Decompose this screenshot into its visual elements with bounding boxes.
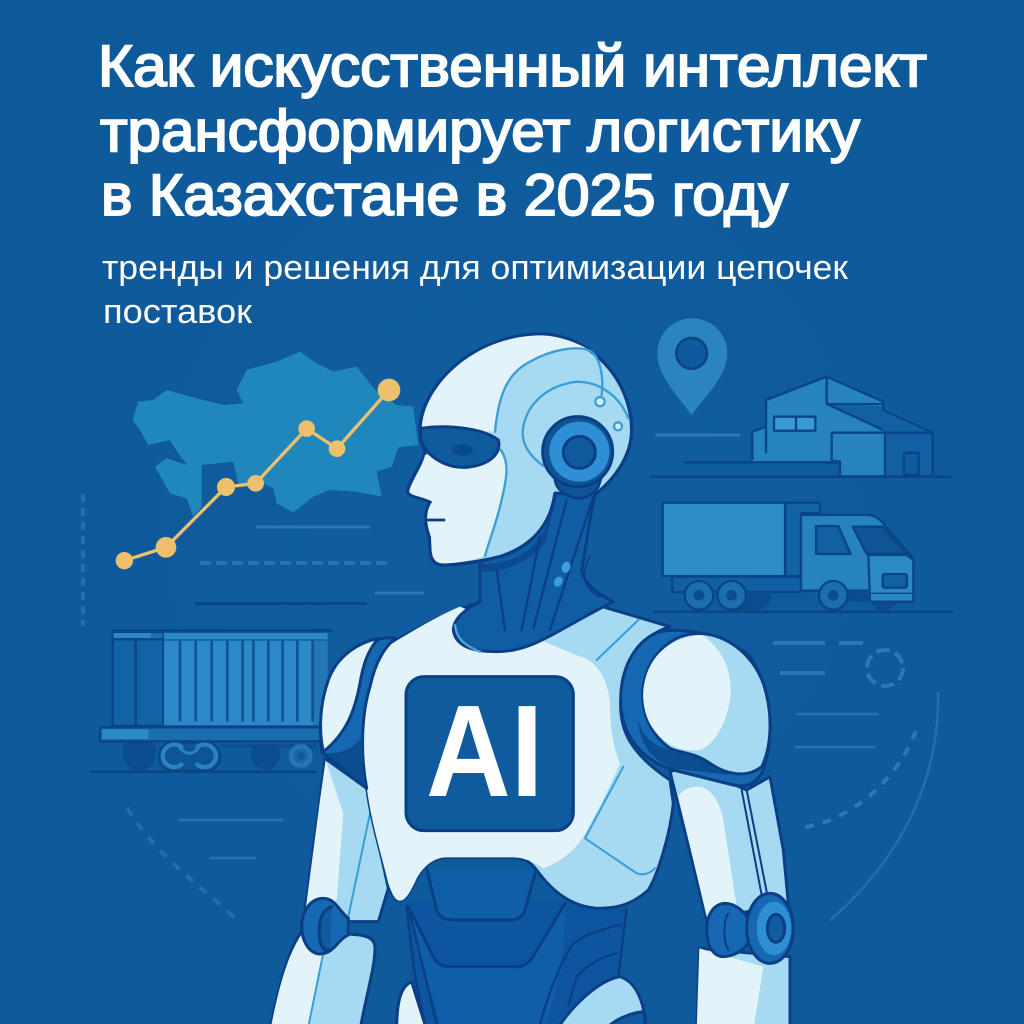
AI chest panel: AI [426, 678, 543, 824]
title: Как искусственный интеллект [98, 34, 927, 99]
robot body [270, 600, 793, 1024]
abdomen [405, 868, 627, 1024]
hips [397, 977, 646, 1024]
right forearm [697, 948, 790, 1024]
face plate [409, 450, 506, 563]
neck [453, 493, 613, 652]
skull highlight [422, 335, 587, 432]
circuit lines [485, 348, 628, 556]
ear module [543, 417, 613, 498]
background decorative marks [83, 435, 938, 920]
right elbow joint [707, 893, 793, 963]
map of Kazakhstan with growth chart [116, 352, 418, 569]
title: трансформирует логистику [100, 99, 860, 164]
subtitle: поставок [103, 293, 253, 331]
robot head and neck [407, 334, 632, 652]
torso [363, 600, 673, 908]
subtitle [102, 249, 849, 331]
left forearm [270, 928, 375, 1024]
right upper arm [670, 765, 788, 920]
title [98, 34, 927, 228]
map shape [133, 352, 418, 517]
title: в Казахстане в 2025 году [101, 163, 788, 228]
subtitle: тренды и решения для оптимизации цепочек [102, 249, 849, 287]
right shoulder [621, 631, 770, 786]
mouth [427, 516, 444, 524]
left upper arm [305, 758, 388, 922]
head shell [407, 334, 632, 565]
left elbow joint [302, 898, 348, 954]
map pin icon [657, 318, 727, 415]
left shoulder [321, 638, 395, 788]
warehouse [650, 377, 952, 477]
ground line [195, 602, 367, 605]
visor [421, 427, 499, 467]
delivery truck [653, 503, 953, 612]
growth line [116, 379, 400, 569]
freight rail car [90, 631, 333, 772]
